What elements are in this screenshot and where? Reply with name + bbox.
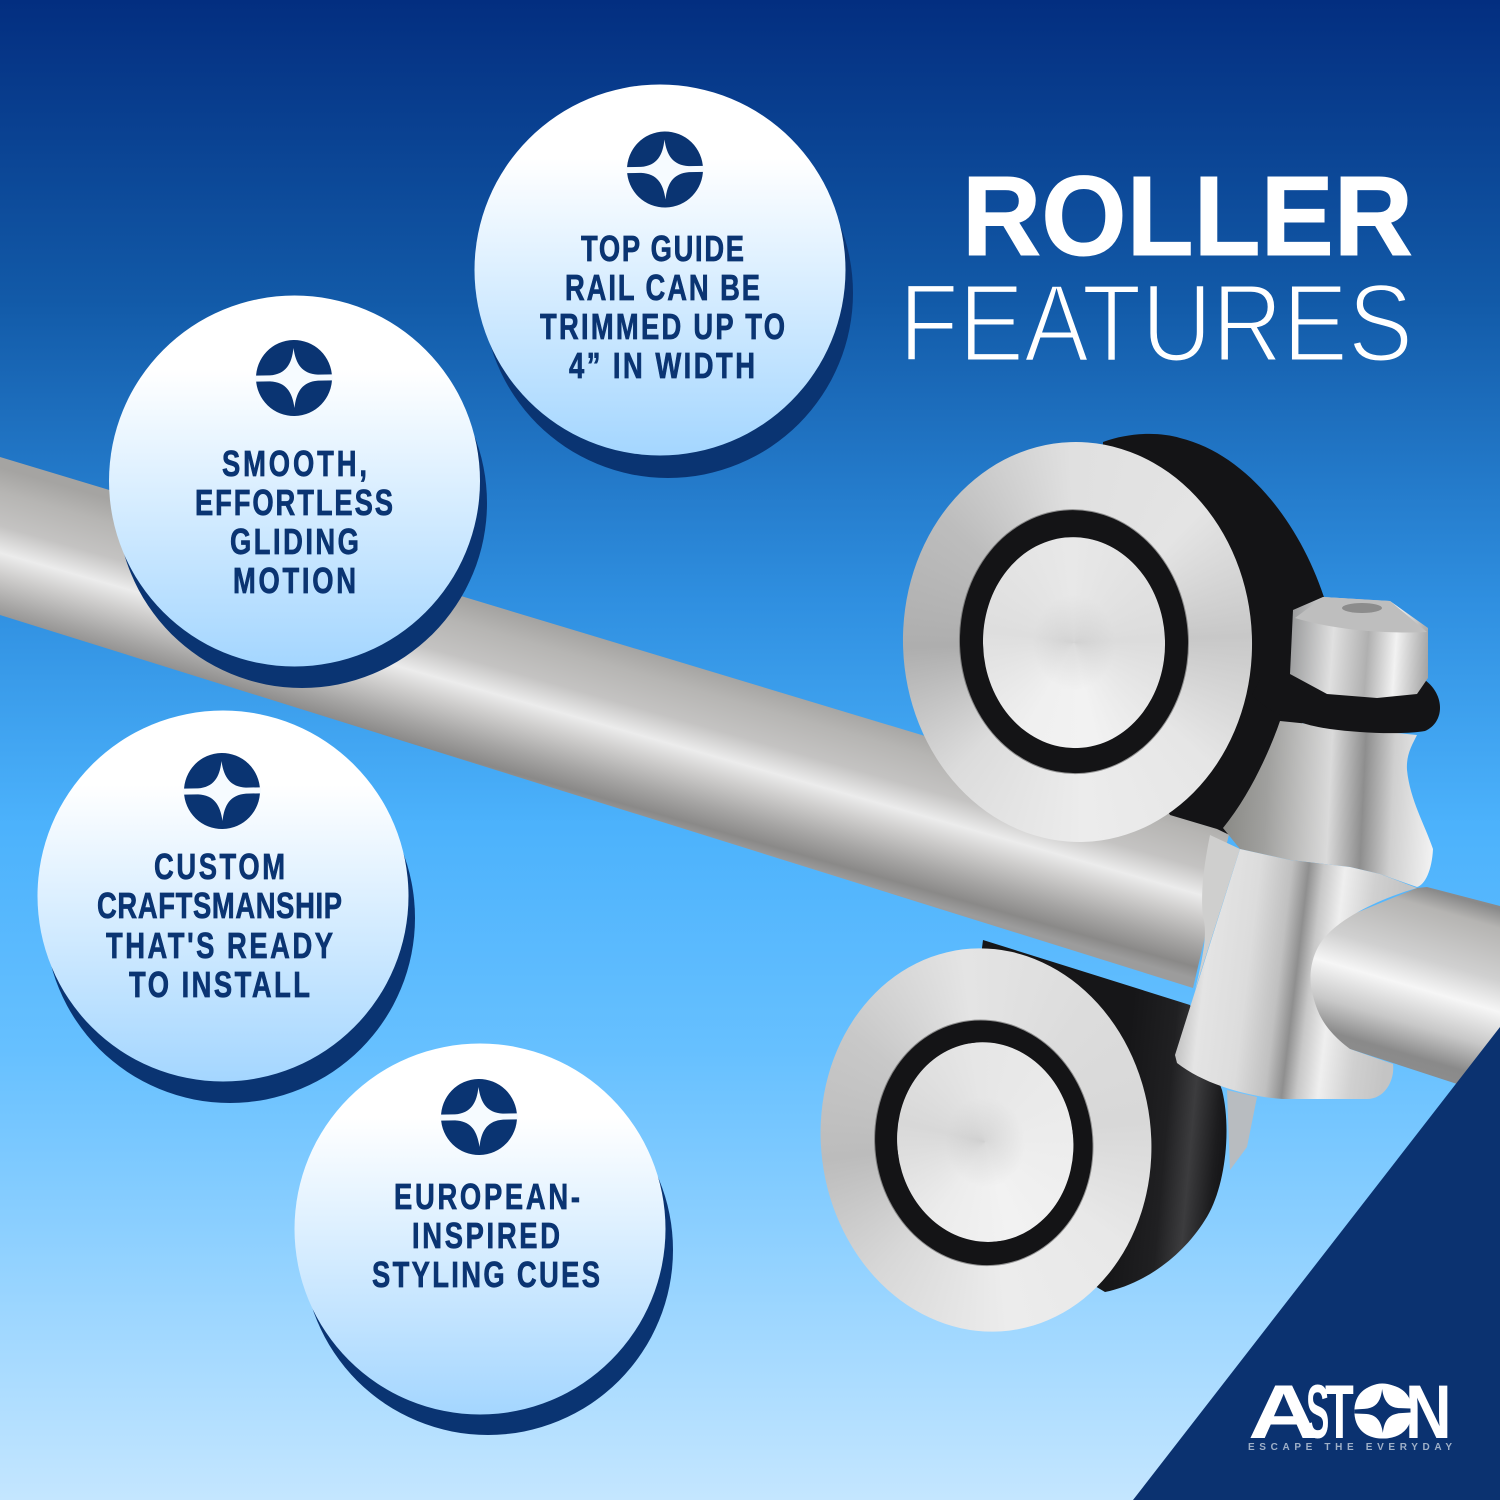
corner triangle	[1133, 1027, 1500, 1500]
polished cap	[979, 534, 1169, 751]
title	[899, 153, 1413, 385]
bracket collar	[1195, 835, 1240, 990]
title: ROLLER	[962, 153, 1413, 279]
callout: smooth gliding	[109, 296, 487, 688]
callout text: CUSTOM	[154, 846, 285, 887]
callout text: TOP GUIDE	[581, 228, 744, 269]
logo: Aston	[1248, 1369, 1452, 1455]
polished cap	[886, 1032, 1085, 1252]
icon: star badge	[254, 339, 334, 417]
lower roller disc	[799, 929, 1173, 1351]
right rail tube	[1290, 887, 1500, 1098]
callout: custom craftsmanship	[38, 710, 415, 1103]
callout text: EFFORTLESS	[195, 482, 393, 523]
roller bracket	[1175, 597, 1500, 1099]
bracket neck	[1223, 721, 1433, 887]
callout text: 4” IN WIDTH	[569, 345, 755, 386]
logo tagline: ESCAPE THE EVERYDAY	[1248, 1442, 1452, 1453]
logo wordmark: A	[1248, 1369, 1319, 1454]
black seal ring	[861, 1008, 1106, 1278]
callout: top guide rail	[474, 84, 853, 478]
callout text: MOTION	[233, 560, 356, 601]
callout text: THAT'S READY	[106, 925, 333, 966]
callout text: TRIMMED UP TO	[540, 306, 785, 347]
callout text	[97, 846, 342, 1005]
callout text	[372, 1176, 600, 1295]
lower roller black wheel	[950, 940, 1257, 1292]
logo wordmark	[1248, 1369, 1452, 1455]
icon: star badge	[439, 1078, 519, 1156]
title: FEATURES	[899, 262, 1413, 385]
callout text: INSPIRED	[412, 1215, 560, 1256]
rubber o-ring	[1252, 680, 1440, 733]
callout text: RAIL CAN BE	[565, 267, 760, 308]
callout text: EUROPEAN-	[394, 1176, 580, 1217]
logo wordmark: N	[1405, 1369, 1452, 1454]
bolt top face	[1295, 597, 1427, 632]
callout text: TO INSTALL	[129, 964, 310, 1005]
bolt cap	[1290, 597, 1428, 698]
callout text: CRAFTSMANSHIP	[97, 885, 342, 926]
callout text	[540, 228, 785, 386]
bracket clamp block	[1175, 849, 1417, 1099]
logo wordmark: S	[1306, 1369, 1329, 1455]
callout: european styling	[294, 1044, 673, 1435]
logo wordmark: O	[1351, 1369, 1415, 1454]
upper roller black wheel	[1100, 434, 1330, 840]
icon: star badge	[182, 752, 262, 830]
logo wordmark: T	[1325, 1371, 1354, 1455]
guide rail tube left	[0, 457, 1230, 988]
callout text	[195, 443, 393, 601]
callout text: STYLING CUES	[372, 1254, 600, 1295]
black seal ring	[955, 506, 1193, 777]
icon: star badge	[625, 131, 705, 208]
callout text: GLIDING	[230, 521, 359, 562]
logo star mark	[1354, 1383, 1411, 1439]
callout text: SMOOTH,	[222, 443, 367, 484]
upper roller disc	[896, 436, 1259, 848]
